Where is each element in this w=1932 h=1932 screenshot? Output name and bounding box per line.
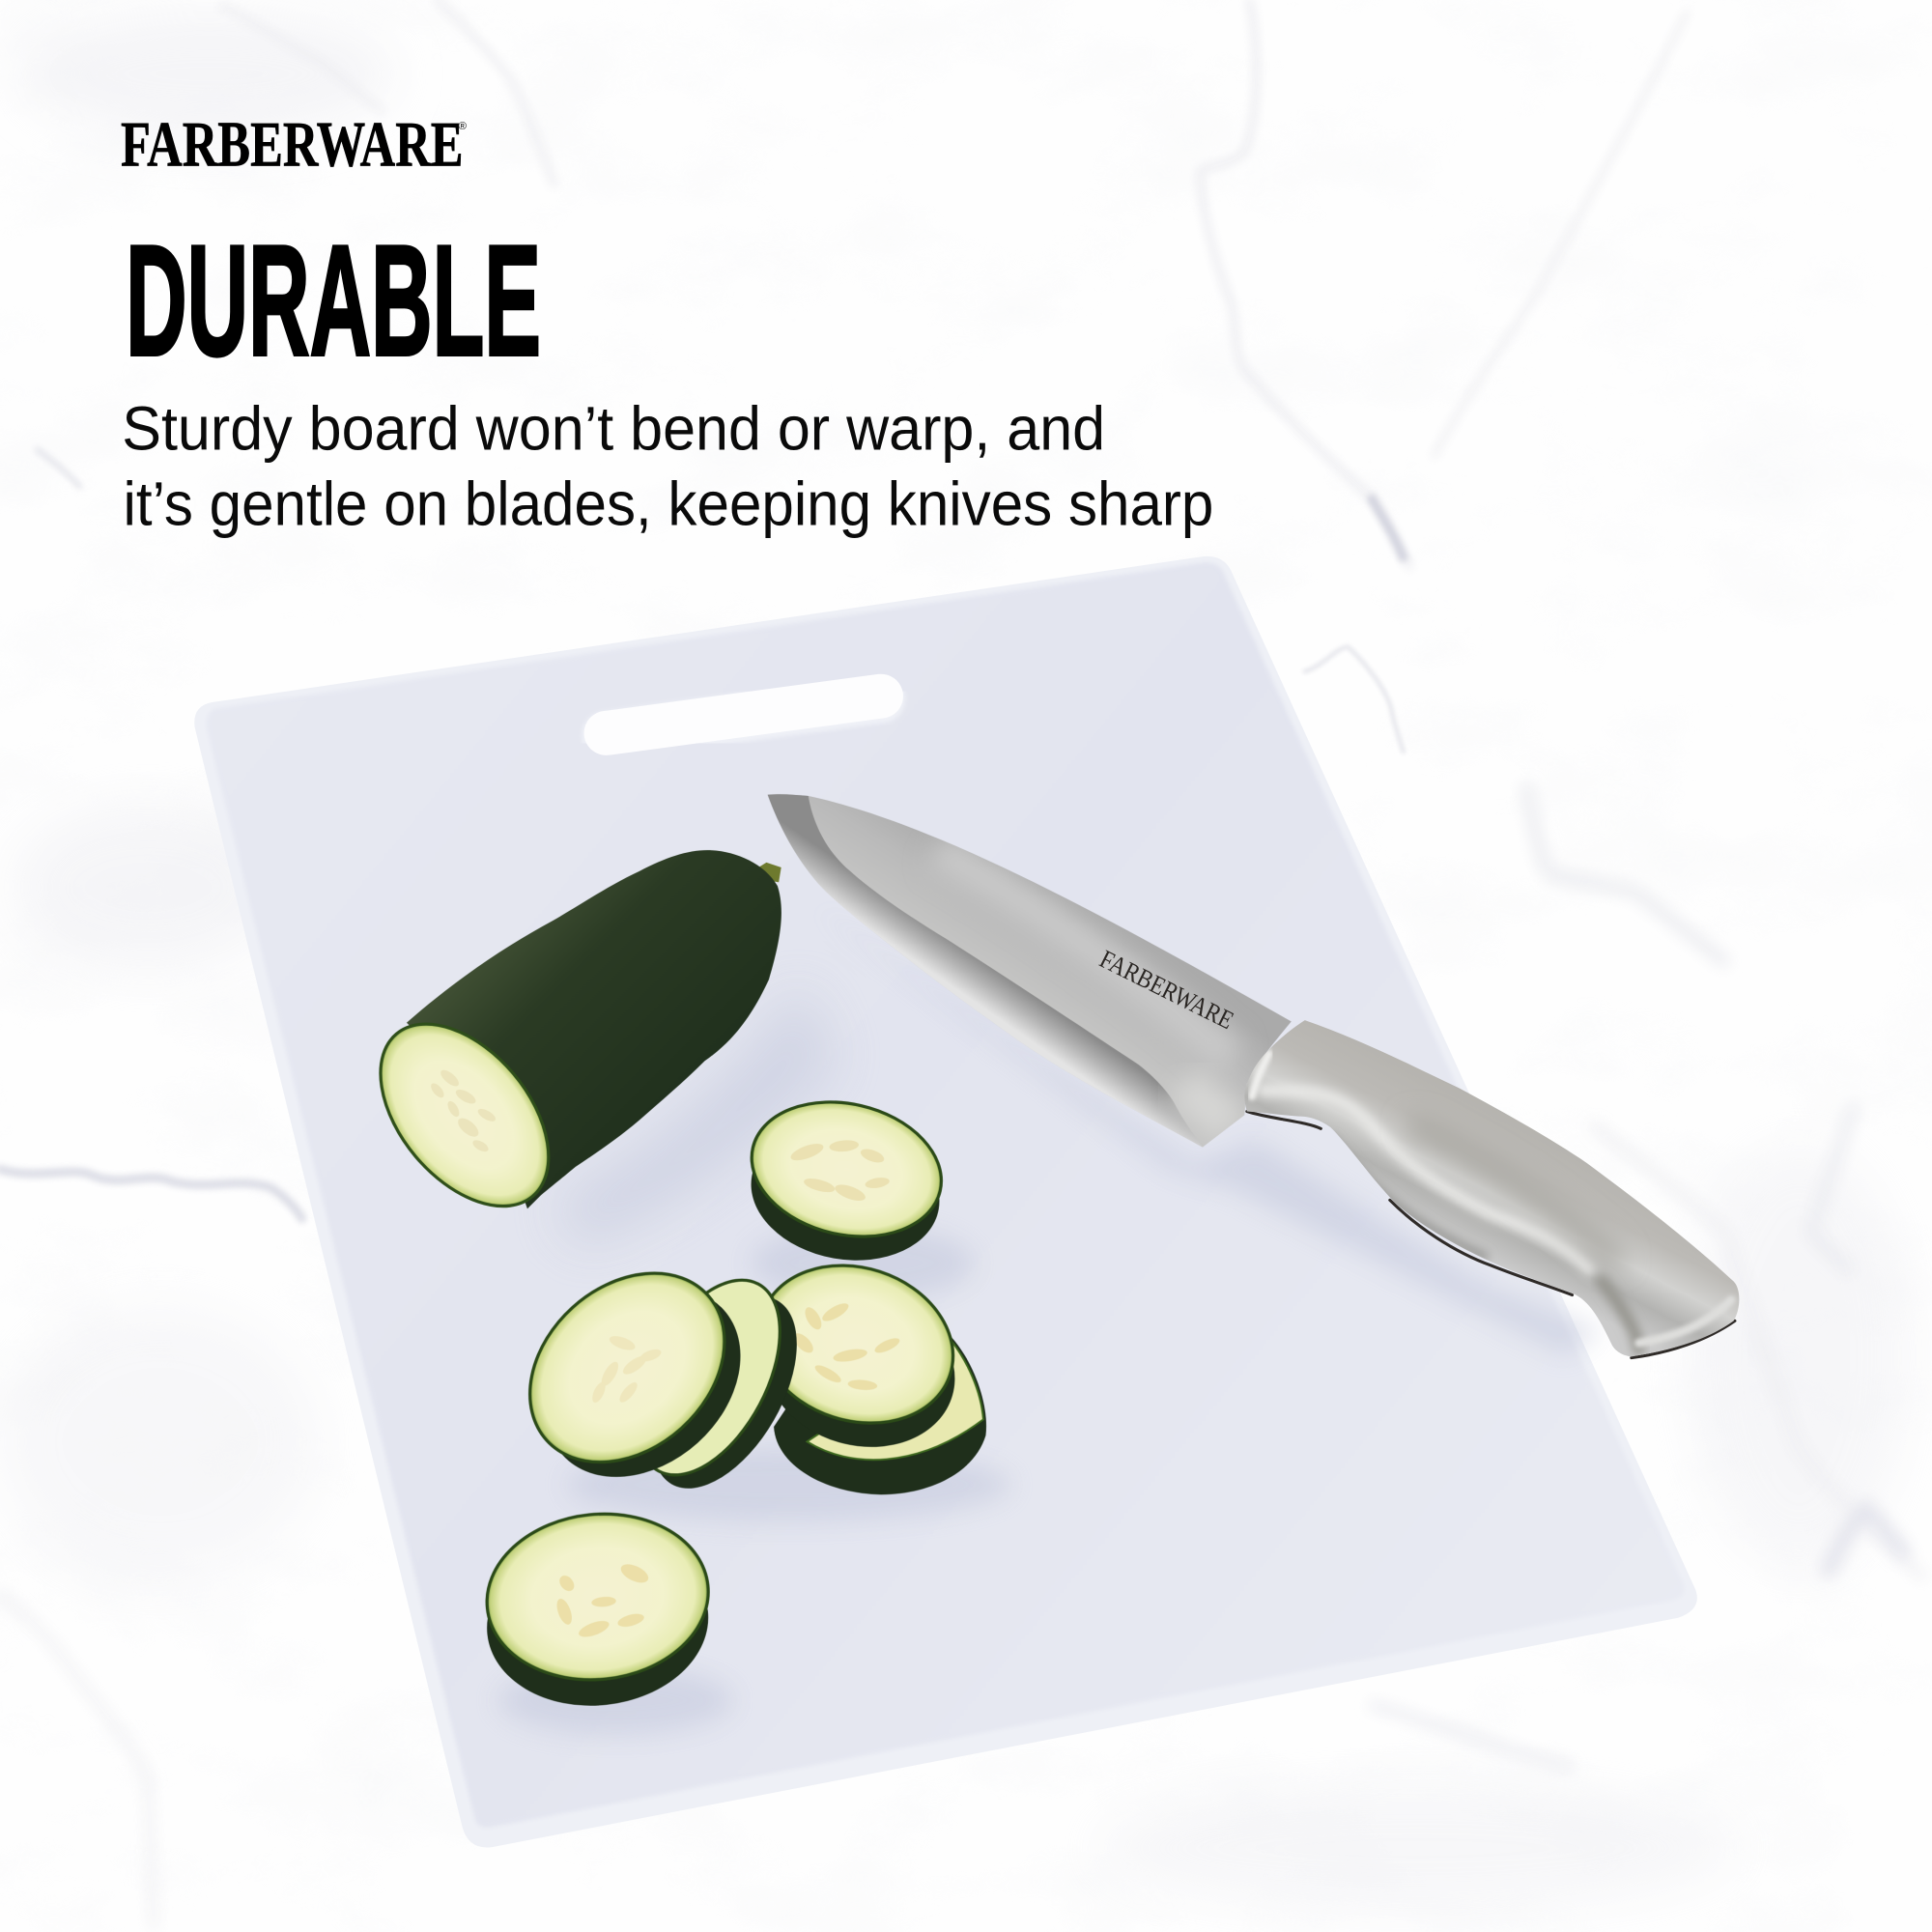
cucumber stem <box>756 863 781 882</box>
cucumber cut face <box>348 993 582 1237</box>
heading: DURABLE: DURABLE <box>126 212 541 388</box>
cucumber half <box>348 850 781 1237</box>
body copy: Sturdy board won’t bend or warp, and <box>122 394 1105 464</box>
cucumber slice: back right <box>774 1337 986 1494</box>
knife blade <box>768 794 1292 1148</box>
cucumber slice: cluster front <box>492 1235 779 1516</box>
cucumber slice: bottom <box>479 1503 717 1717</box>
cucumber skin <box>407 850 781 1208</box>
knife handle <box>1244 1020 1739 1356</box>
blade bevel <box>768 794 1203 1148</box>
board surface <box>207 563 1684 1828</box>
body copy <box>122 394 1213 538</box>
handle underside <box>1247 1112 1735 1358</box>
board edge <box>194 556 1697 1847</box>
cucumber slice: cluster middle <box>608 1257 827 1513</box>
brand logo: Farberware: FARBERWARE <box>121 110 464 181</box>
cucumber slice: cluster right <box>739 1241 974 1469</box>
handle hole <box>607 696 881 735</box>
cucumber slice: top right <box>738 1084 954 1275</box>
knife brand mark: FARBERWARE <box>1095 944 1238 1035</box>
cutting board <box>194 556 1697 1847</box>
cucumber seeds <box>429 1067 497 1154</box>
brand logo: Farberware: ® <box>458 121 467 132</box>
handle highlights <box>1252 1054 1731 1350</box>
blade sheen <box>936 850 1233 1127</box>
body copy: it’s gentle on blades, keeping knives sharp <box>124 469 1213 538</box>
shadows on board <box>499 906 1602 1735</box>
chef knife <box>768 794 1739 1358</box>
